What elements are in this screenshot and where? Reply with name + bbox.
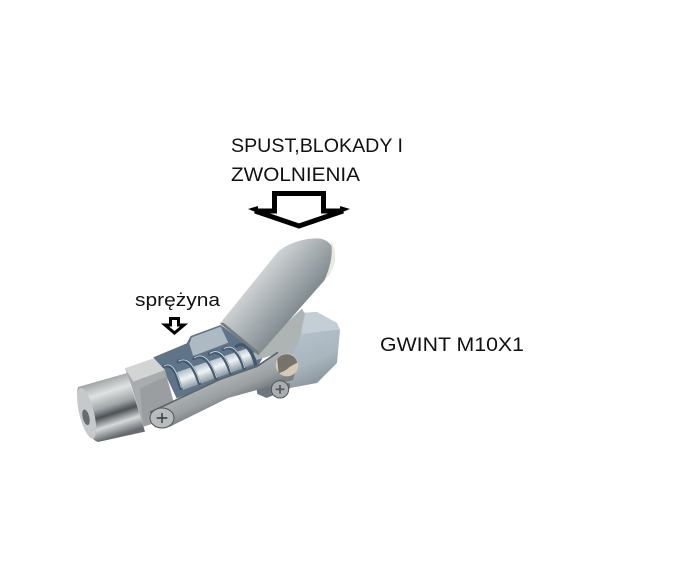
nozzle cylinder [77,373,145,442]
trigger side flap [253,309,305,360]
side rail [150,353,298,427]
heading: trigger label: ZWOLNIENIA [231,165,360,186]
arrow: large outlined arrow pointing at trigger [248,194,350,226]
label: thread size: GWINT M10X1 [380,335,524,356]
square threaded end [273,312,340,388]
body housing behind spring [153,325,263,398]
heading: trigger label [231,136,403,186]
spring coils [163,345,255,388]
label: spring: sprężyna [135,290,221,310]
front screw [150,408,174,428]
spring rod [173,347,257,390]
trigger lever [220,238,335,355]
photo: grease coupler [73,238,340,442]
heading: trigger label: SPUST,BLOKADY I [231,136,403,157]
rivet pin [276,354,298,376]
lower screw [271,381,289,398]
lower bracket [257,382,290,398]
hex nut [125,358,175,427]
arrow: small arrow pointing at spring [165,318,184,333]
